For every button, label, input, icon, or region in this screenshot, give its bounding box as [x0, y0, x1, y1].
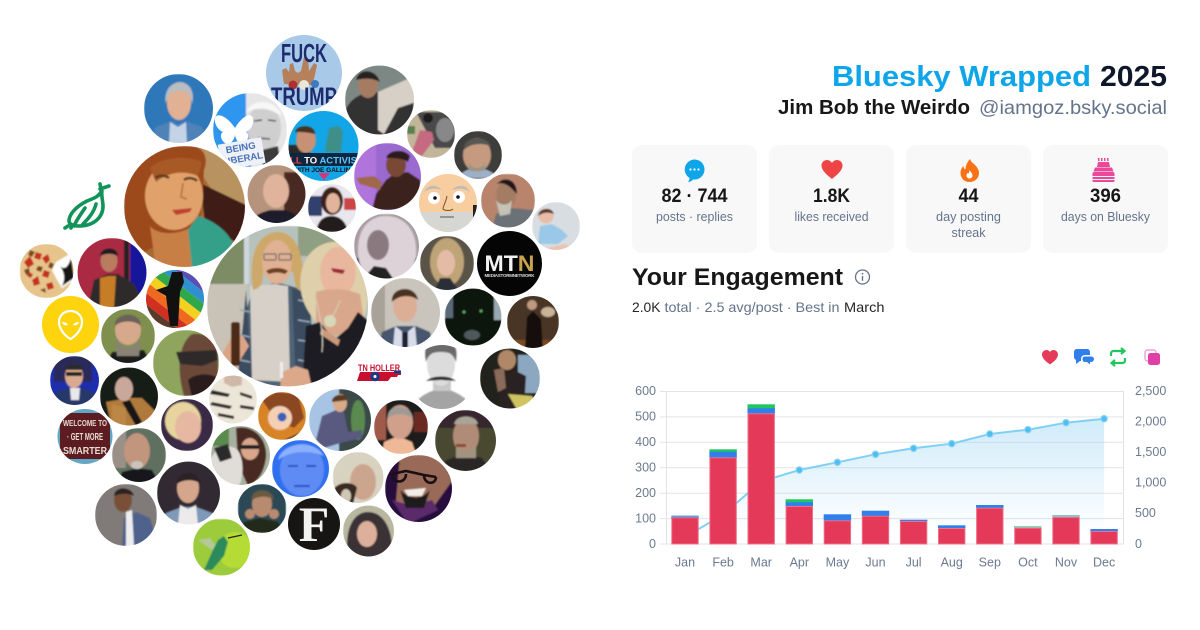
avatar: Fuck Trump sign: TRUMP: [271, 83, 337, 111]
avatar: anime girl: [258, 392, 306, 440]
avatar: man in peach shirt: [374, 400, 428, 454]
left axis labels: 0: [649, 537, 656, 551]
avatar: news anchor: [50, 356, 100, 406]
user name and handle: [778, 97, 1167, 119]
avatar: MTN logo: [477, 231, 542, 296]
stat: posts and replies: posts · replies: [656, 210, 733, 224]
avatar: main profile photo, couple: [207, 226, 370, 390]
avatar: cartoon old man: [419, 174, 477, 234]
left axis labels: 400: [635, 435, 656, 449]
engagement summary: total · 2.5 avg/post · Best in: [664, 299, 840, 315]
avatar: comedian with microphone: [354, 143, 422, 211]
icon: likes heart: [1042, 350, 1058, 364]
avatar: woman with dog, black dress: [507, 295, 559, 350]
chart: monthly engagement stacked bars with cumulative line: [635, 384, 1166, 570]
avatar: bald man indoors: [247, 165, 308, 226]
avatar: Being Liberal butterfly portrait: [213, 93, 287, 170]
user name and handle: Jim Bob the Weirdo: [778, 97, 970, 119]
stat: days on Bluesky: [1061, 186, 1151, 224]
heading: Your Engagement: Your Engagement: [632, 264, 843, 291]
avatar: bald man with goatee: [112, 428, 166, 484]
left axis labels: [635, 384, 656, 551]
stat: posts and replies: 82 · 744: [662, 186, 728, 207]
left axis labels: 500: [635, 410, 656, 424]
left axis labels: 600: [635, 384, 656, 398]
icon: flame: [960, 159, 979, 182]
engagement summary: 2.0K: [632, 299, 661, 315]
avatar: Onion logo: [65, 184, 109, 228]
avatar: man in dark coat: [345, 65, 416, 135]
stat: day posting streak: streak: [952, 226, 986, 240]
avatar: Welcome to Get More Smarter sign: WELCOME TO: [63, 418, 107, 428]
stat: day posting streak: [936, 186, 1001, 240]
avatar: young blonde woman: [420, 236, 474, 292]
avatar: man in beanie, brick wall: [481, 174, 536, 228]
month labels: Dec: [1093, 556, 1115, 570]
stat: posts and replies: [656, 186, 733, 224]
avatar bubble cluster: [20, 35, 580, 576]
avatar: blonde woman: [161, 399, 213, 451]
bars: replies: [671, 408, 1118, 532]
left axis labels: 100: [635, 512, 656, 526]
panel: posts and replies: [632, 145, 757, 253]
month labels: Nov: [1055, 556, 1078, 570]
panel: days on Bluesky: [1043, 145, 1168, 253]
avatar: MTN logo: MEDIASTORMNETWORK: [484, 273, 535, 278]
bars: likes: [672, 414, 1117, 544]
avatar: black wolf: [445, 288, 502, 346]
avatar: hummingbird: [193, 519, 253, 576]
stat: likes received: likes received: [794, 210, 869, 224]
avatar: Being Liberal butterfly portrait: BEING: [225, 140, 256, 156]
avatar: man in suit at podium: [309, 389, 372, 452]
month labels: Aug: [941, 556, 963, 570]
right axis labels: 1,000: [1135, 476, 1166, 490]
right axis labels: 500: [1135, 506, 1156, 520]
avatar: MTN logo: MTN: [484, 251, 534, 276]
avatar: man pointing, red and blue: [77, 238, 148, 310]
icon: birthday cake: [1092, 158, 1114, 182]
avatar: dog with tongue: [407, 110, 455, 158]
stat: days on Bluesky: 396: [1090, 186, 1121, 207]
avatar: F logo: [288, 496, 340, 552]
stat: day posting streak: day posting: [936, 210, 1001, 224]
month labels: Jun: [865, 556, 886, 570]
avatar: woman with dark hair: [343, 505, 395, 558]
panel: day posting streak: [906, 145, 1031, 253]
month labels: Apr: [790, 556, 809, 570]
legend: [1042, 348, 1160, 366]
avatar: man with glasses, blue blazer: [95, 484, 158, 546]
cumulative area: [685, 419, 1104, 544]
cumulative line: [685, 419, 1104, 537]
line markers: [796, 416, 1107, 473]
avatar: man in suit: [371, 278, 441, 348]
panel: likes received: [769, 145, 894, 253]
avatar: smiling man with glasses, purple: [385, 455, 453, 524]
icon: reposts: [1111, 348, 1125, 366]
right axis labels: 2,000: [1135, 414, 1166, 428]
avatar: woman with tattoos: [480, 348, 540, 410]
icon: heart: [822, 160, 842, 179]
month labels: [675, 556, 1115, 570]
month labels: May: [826, 556, 850, 570]
avatar: woman with husky: [211, 426, 271, 486]
avatar: Welcome to Get More Smarter sign: SMARTER: [63, 445, 107, 457]
stat: day posting streak: 44: [958, 186, 979, 207]
avatar: blue Trump portrait: [272, 440, 330, 498]
title: Bluesky Wrapped: [832, 61, 1091, 93]
avatar: Fuck Trump sign: FUCK: [281, 38, 327, 68]
avatar: man in sunglasses, foliage: [153, 330, 219, 398]
title: 2025: [1100, 61, 1167, 93]
month labels: Oct: [1018, 556, 1038, 570]
avatar: man with hands at face: [238, 484, 286, 534]
avatar: mosaic art: [20, 244, 74, 298]
avatar: baby: [532, 202, 580, 252]
avatar: bearded man: [101, 309, 155, 364]
avatar: Welcome to Get More Smarter sign: · GET MORE: [67, 431, 103, 443]
avatar: yellow alien: [42, 296, 99, 353]
icon: replies: [1074, 349, 1094, 364]
engagement summary: March: [844, 299, 884, 315]
avatar: man in tan jacket: [100, 367, 159, 428]
avatar: TN Holler logo: TN HOLLER: [358, 363, 400, 374]
avatar: woman with red hair: [124, 146, 246, 270]
avatar: man with cigar: [435, 410, 497, 472]
avatar: man on blue background: [144, 74, 214, 144]
left axis labels: 200: [635, 486, 656, 500]
right axis labels: 1,500: [1135, 445, 1166, 459]
icon: quotes: [1145, 350, 1160, 365]
month labels: Sep: [979, 556, 1001, 570]
avatar: mustache man drawing: [418, 345, 466, 409]
avatar: Call to Activism: [288, 111, 358, 181]
user name and handle: @iamgoz.bsky.social: [979, 97, 1167, 119]
right axis labels: 2,500: [1135, 384, 1166, 398]
engagement summary: [632, 299, 884, 315]
right axis labels: 0: [1135, 537, 1142, 551]
avatar: young man in blue blazer: [157, 461, 221, 525]
avatar: Being Liberal butterfly portrait: LIBERAL: [221, 150, 264, 168]
icon: chat bubble: [685, 160, 705, 182]
avatar: rainbow flag with silhouette: [146, 270, 204, 328]
avatar: Call to Activism: ALL TO ACTIVISM: [283, 156, 365, 166]
avatar: woman in zebra sweater: [209, 375, 257, 425]
avatar: F logo: F: [299, 496, 329, 552]
avatar: Welcome to Get More Smarter sign: [57, 408, 113, 465]
month labels: Jul: [906, 556, 922, 570]
bars: reposts and quotes: [671, 404, 1080, 528]
left axis labels: 300: [635, 460, 656, 474]
avatar: TN Holler logo: [357, 363, 401, 381]
avatar: Call to Activism: WITH JOE GALLINA: [293, 167, 355, 174]
stat: days on Bluesky: days on Bluesky: [1061, 210, 1151, 224]
avatar: woman with flag: [308, 184, 356, 232]
avatar: grey-haired man: [454, 131, 502, 179]
grid and axes: [660, 391, 1124, 544]
month labels: Feb: [712, 556, 734, 570]
icon: info: [856, 270, 870, 284]
avatar: man with dog selfie: [333, 452, 384, 504]
stat: likes received: [794, 186, 869, 224]
avatar: Fuck Trump sign: [266, 35, 342, 111]
avatar: blonde woman, monochrome: [354, 214, 420, 280]
right axis labels: [1135, 384, 1166, 551]
month labels: Mar: [750, 556, 772, 570]
month labels: Jan: [675, 556, 695, 570]
stat: likes received: 1.8K: [813, 186, 850, 207]
